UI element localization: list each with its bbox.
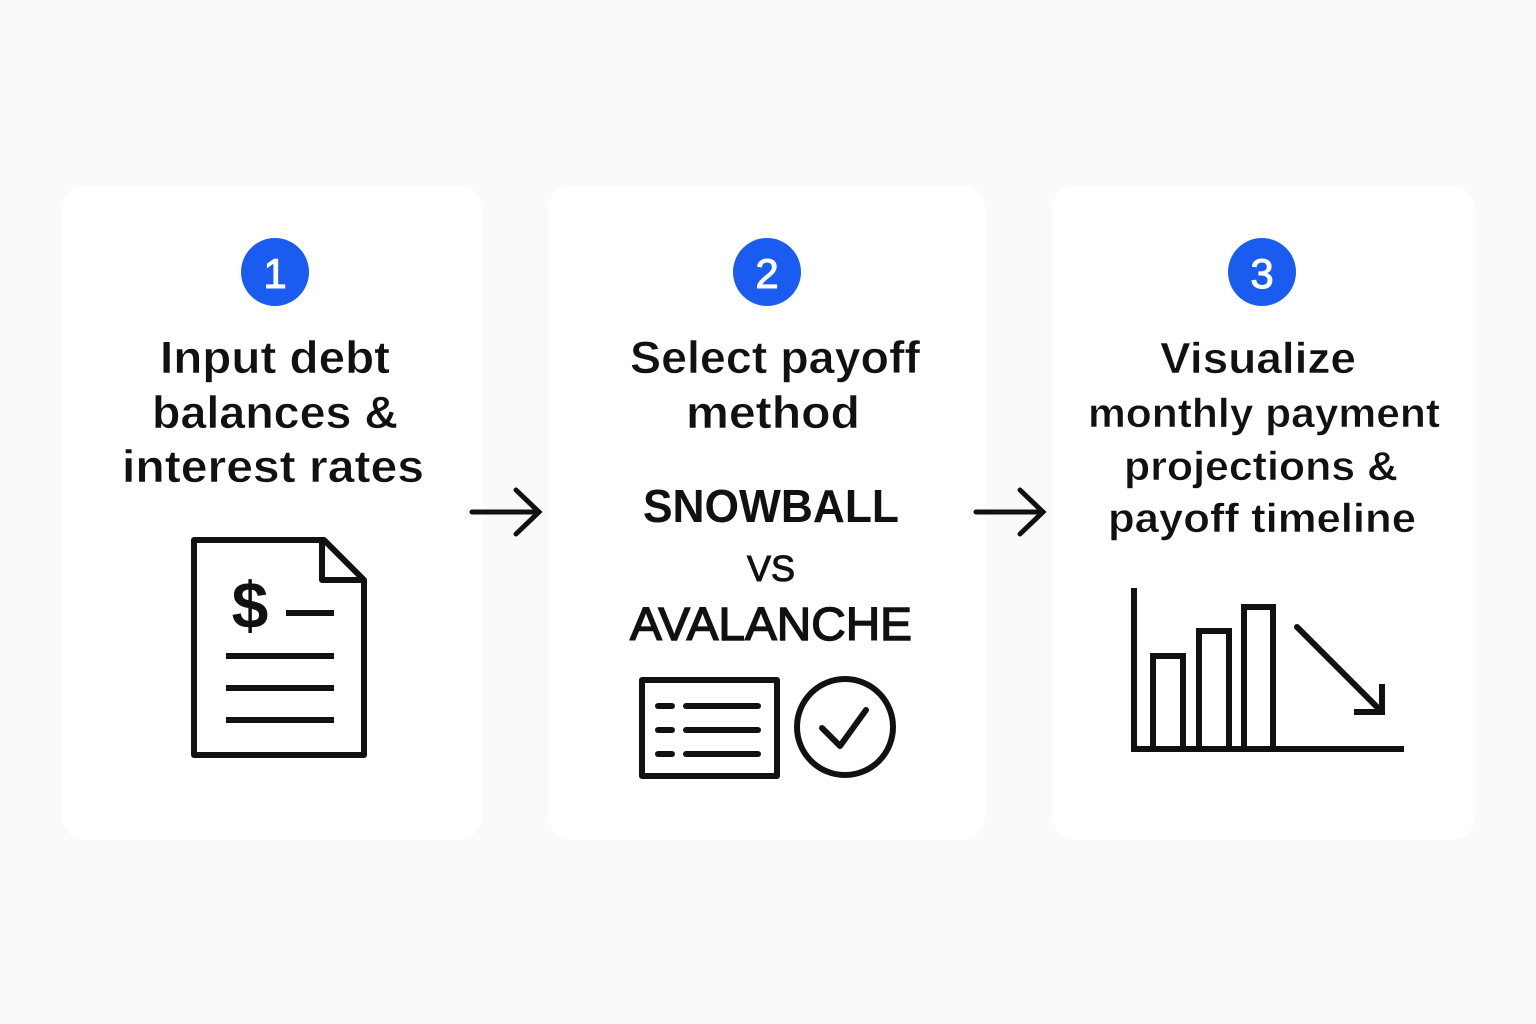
badge 3: 3 — [1250, 250, 1274, 297]
heading: step 2: method — [686, 387, 860, 438]
heading: step 2 — [630, 332, 921, 438]
panel: step 1 — [62, 185, 482, 840]
heading: step 3: payoff timeline — [1108, 495, 1416, 541]
badge 3 — [1228, 238, 1296, 306]
icon: document with dollar: $ — [232, 568, 268, 642]
text: snowball vs avalanche: SNOWBALL — [643, 480, 899, 532]
heading: step 2: Select payoff — [630, 332, 921, 383]
heading: step 3: monthly payment — [1088, 390, 1440, 436]
heading: step 3 — [1088, 334, 1440, 541]
badge 2: 2 — [755, 250, 779, 297]
heading: step 1: Input debt — [160, 332, 390, 383]
arrow 2 — [976, 490, 1043, 534]
heading: step 3: projections & — [1124, 443, 1398, 489]
text: snowball vs avalanche: AVALANCHE — [630, 598, 912, 650]
heading: step 1 — [122, 332, 424, 492]
text: snowball vs avalanche — [630, 480, 912, 650]
arrow 1 — [472, 490, 539, 534]
heading: step 1: interest rates — [122, 441, 424, 492]
badge 1 — [241, 238, 309, 306]
badge 1: 1 — [263, 250, 287, 297]
heading: step 1: balances & — [152, 387, 398, 438]
icon: document with dollar — [194, 540, 364, 755]
heading: step 3: Visualize — [1160, 334, 1356, 383]
panel: step 3 — [1052, 185, 1475, 840]
panel: step 2 — [548, 185, 985, 840]
badge 2 — [733, 238, 801, 306]
text: snowball vs avalanche: VS — [747, 548, 795, 589]
icon: declining bar chart — [1134, 588, 1404, 749]
icon: list and checkmark — [642, 679, 893, 776]
